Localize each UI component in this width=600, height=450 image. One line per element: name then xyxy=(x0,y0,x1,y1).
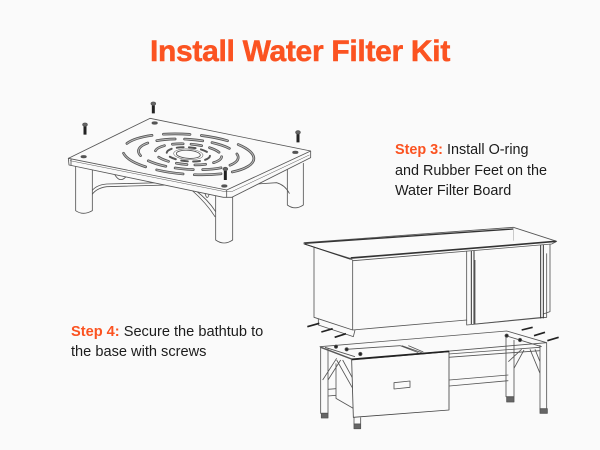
text: step 4: the base with screws xyxy=(71,344,206,360)
text: step 3: Step 3: Install O-ring xyxy=(395,142,529,158)
illustration: water filter board xyxy=(68,102,311,243)
tub bracket xyxy=(318,318,355,337)
feet xyxy=(321,397,547,429)
front right leg xyxy=(216,193,233,243)
text: step 3 xyxy=(395,142,547,199)
screws xyxy=(85,105,298,180)
text: step 3: Water Filter Board xyxy=(395,183,511,199)
rear cross rail xyxy=(328,375,508,396)
left legs xyxy=(321,347,353,413)
text: step 4: Step 4: Secure the bathtub to xyxy=(71,324,263,340)
tub rim xyxy=(304,227,557,261)
text: step 3: and Rubber Feet on the xyxy=(395,162,547,178)
drawer handle xyxy=(394,381,410,389)
tub body xyxy=(314,247,547,330)
braces xyxy=(91,182,289,197)
bolts xyxy=(307,323,559,341)
frame bolts xyxy=(334,345,338,348)
board plate xyxy=(68,118,311,197)
slots xyxy=(121,130,255,179)
holes xyxy=(152,122,157,124)
title: Install Water Filter Kit xyxy=(150,35,450,68)
right legs xyxy=(506,335,547,409)
back right leg xyxy=(287,163,303,208)
front left leg xyxy=(76,167,92,213)
drawer panel xyxy=(352,352,449,417)
illustration: bathtub xyxy=(304,227,559,341)
illustration: base frame with drawer xyxy=(320,331,547,429)
top frame xyxy=(320,331,547,359)
text: step 4 xyxy=(71,324,263,360)
